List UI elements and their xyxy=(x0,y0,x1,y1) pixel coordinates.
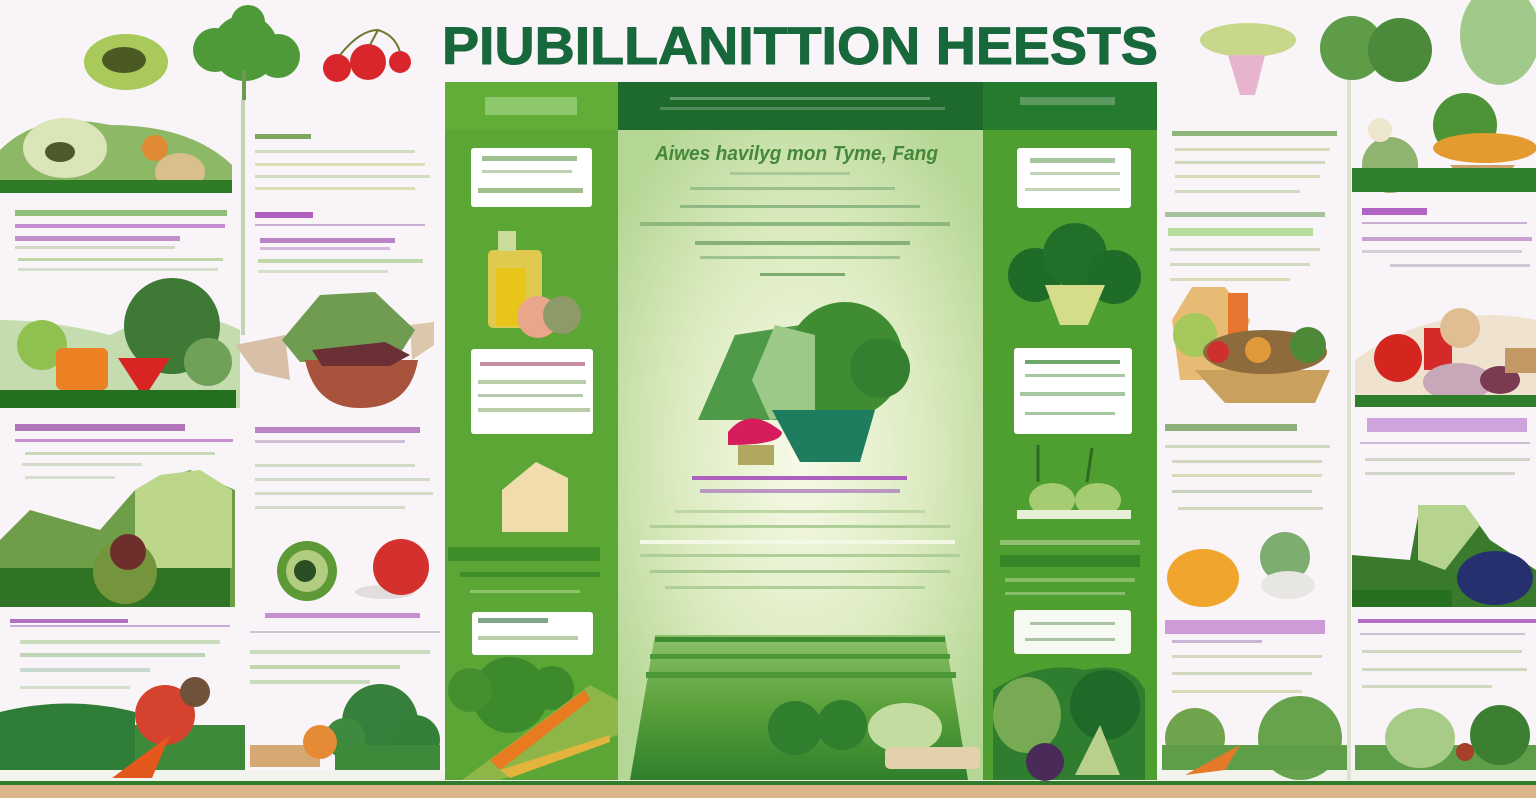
text block: right green xyxy=(1000,540,1140,595)
icon: apple xyxy=(355,539,429,599)
illustration: leeks and grapes xyxy=(1352,505,1536,607)
illustration: greens in a bowl with radish xyxy=(698,302,910,465)
icon: cheese wedge xyxy=(502,462,568,532)
header bar xyxy=(618,82,983,130)
text block: second 1 xyxy=(255,134,430,190)
icon: avocado xyxy=(84,34,168,90)
callout: first xyxy=(1017,148,1131,208)
text block: third 3 xyxy=(1165,424,1330,510)
icon: leafy greens xyxy=(193,5,300,100)
illustration: bottom vegetables xyxy=(0,677,245,778)
base strip xyxy=(0,770,1536,798)
text block: second 4 xyxy=(250,613,440,684)
icon: radish with greens xyxy=(1200,23,1296,95)
illustration: grasses and vegetables xyxy=(0,470,235,607)
icon: pumpkin xyxy=(1167,549,1239,607)
illustration: bottom greens xyxy=(1355,705,1536,770)
illustration: greens and carrot xyxy=(1162,696,1347,780)
illustration: vegetables basket xyxy=(1352,93,1536,193)
panel: left column xyxy=(0,5,411,778)
text block: right 1 xyxy=(1362,208,1532,267)
text block: center body xyxy=(640,510,960,589)
panel: center xyxy=(618,82,983,780)
text block: third 1 xyxy=(1172,131,1337,193)
text block: third 2 xyxy=(1165,212,1325,281)
callout: second xyxy=(471,349,593,434)
title: PIUBILLANITTION HEESTS xyxy=(442,17,1158,76)
text block: left 3 xyxy=(10,619,230,689)
text block: third 4 xyxy=(1165,620,1325,693)
icon: top leafy greens xyxy=(1320,0,1536,85)
icon: salad bowl xyxy=(1260,532,1315,599)
panel: second column xyxy=(235,100,440,770)
illustration: field and vegetables xyxy=(630,635,980,780)
illustration: kale and broccoli xyxy=(993,668,1145,781)
text block: left 1 xyxy=(15,210,227,271)
illustration: food basket xyxy=(1172,287,1330,403)
text block: purple caption xyxy=(692,476,907,493)
illustration: broccoli and carrots xyxy=(250,684,440,770)
text block: left 2 xyxy=(15,424,233,479)
illustration: broccoli and carrot bundle xyxy=(448,657,618,780)
text block: second 3 xyxy=(255,427,433,509)
panel: third column xyxy=(1162,23,1347,780)
text block: left green xyxy=(448,547,600,593)
callout: second xyxy=(1014,348,1132,434)
text block: second 2 xyxy=(255,212,425,273)
callout: third xyxy=(472,612,593,655)
header label xyxy=(1020,97,1115,105)
text block: right 3 xyxy=(1358,619,1536,688)
icon: oil bottle and peach xyxy=(488,231,581,338)
illustration: salad bowl xyxy=(235,292,434,408)
header label xyxy=(485,97,577,115)
callout: first xyxy=(471,148,592,207)
icon: kiwi xyxy=(277,541,337,601)
icon: broccoli xyxy=(1008,223,1141,325)
text block: intro xyxy=(640,172,950,276)
icon: cherries xyxy=(323,30,411,82)
illustration: peppers and onions xyxy=(1355,308,1536,407)
heading: Aiwes havilyg mon Tyme, Fang xyxy=(654,143,938,165)
callout: third xyxy=(1014,610,1131,654)
panel: right column xyxy=(1320,0,1536,780)
icon: pears on a plate xyxy=(1017,445,1131,519)
illustration: cabbage and vegetables xyxy=(0,118,232,193)
illustration: broccoli and peppers xyxy=(0,278,240,408)
panel: left green column xyxy=(445,82,618,780)
text block: right 2 xyxy=(1360,418,1530,475)
panel: right green column xyxy=(983,82,1157,781)
